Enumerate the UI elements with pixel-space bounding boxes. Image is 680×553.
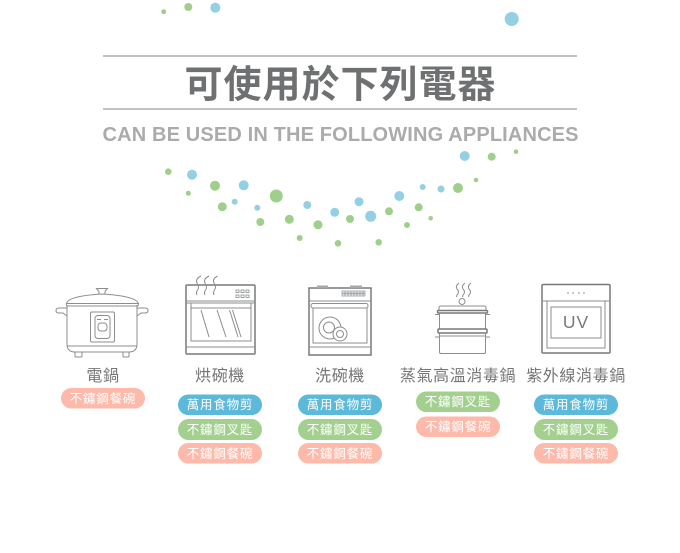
icon: dishwasher [309, 286, 371, 355]
pills: oven: 不鏽鋼餐碗 [187, 446, 253, 461]
pills: UV sterilizer: 萬用食物剪 [543, 397, 609, 412]
pills: dishwasher: 不鏽鋼餐碗 [307, 446, 373, 461]
label: dishwasher: 洗碗機 [315, 367, 365, 385]
icon: rice cooker [56, 288, 148, 357]
pills: steamer: 不鏽鋼餐碗 [425, 419, 491, 434]
label: rice cooker: 電鍋 [86, 367, 120, 385]
dot arc decoration [165, 149, 518, 247]
icon: steamer [435, 283, 490, 354]
pills: steamer: 不鏽鋼叉匙 [425, 394, 491, 409]
top dots [161, 3, 519, 26]
label: UV sterilizer: 紫外線消毒鍋 [526, 367, 626, 385]
pills: rice cooker [61, 388, 145, 408]
pills: steamer [416, 392, 500, 437]
pills: oven [178, 394, 262, 464]
pills: UV sterilizer: 不鏽鋼叉匙 [543, 422, 609, 437]
pills: dishwasher [298, 394, 382, 464]
label: steamer: 蒸氣高溫消毒鍋 [400, 367, 516, 385]
pills: rice cooker: 不鏽鋼餐碗 [70, 391, 136, 406]
icon: oven [186, 276, 255, 354]
pills: oven: 萬用食物剪 [187, 397, 253, 412]
pills: dishwasher: 萬用食物剪 [307, 397, 373, 412]
title: 可使用於下列電器 [184, 64, 496, 106]
pills: oven: 不鏽鋼叉匙 [187, 422, 253, 437]
label: oven: 烘碗機 [195, 367, 245, 385]
pills: dishwasher: 不鏽鋼叉匙 [307, 422, 373, 437]
subtitle: CAN BE USED IN THE FOLLOWING APPLIANCES [102, 124, 578, 146]
icon: UV sterilizer [542, 284, 610, 353]
UV label: UV [563, 312, 589, 332]
pills: UV sterilizer [534, 394, 618, 464]
pills: UV sterilizer: 不鏽鋼餐碗 [543, 446, 609, 461]
